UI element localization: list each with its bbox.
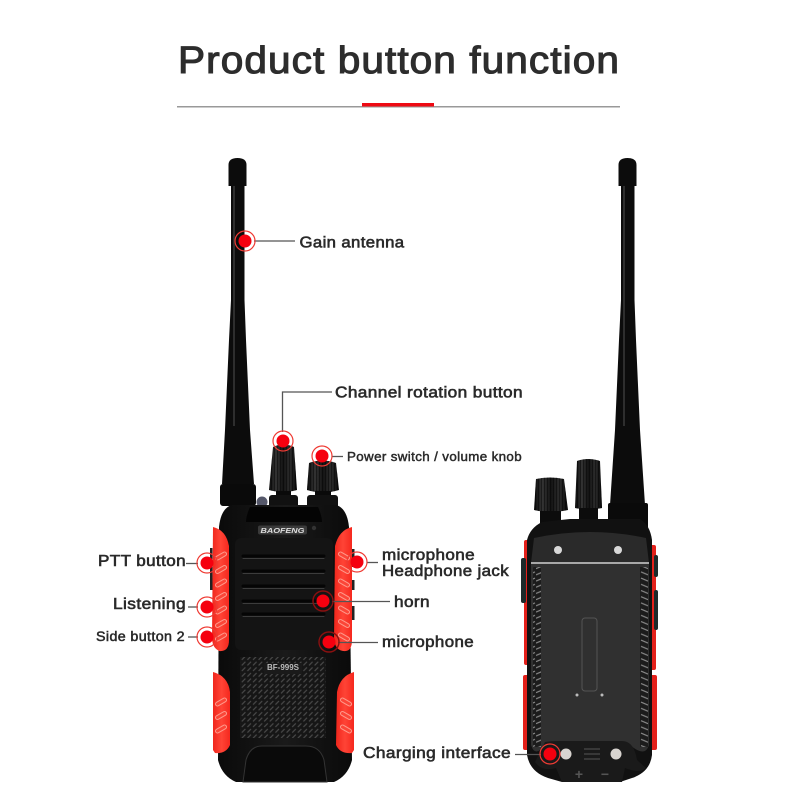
back left knob bbox=[534, 478, 568, 526]
right side buttons bbox=[352, 549, 354, 620]
battery plate bbox=[531, 563, 649, 752]
callout: gain antenna: Gain antenna bbox=[300, 234, 405, 252]
right lower red grip bbox=[336, 672, 354, 753]
callout: gain antenna bbox=[235, 231, 405, 252]
model label bbox=[264, 663, 302, 674]
title divider bbox=[177, 103, 620, 108]
callout: channel rotation button: Channel rotation button bbox=[335, 384, 523, 402]
charging base bbox=[535, 741, 646, 782]
callout: PTT button: PTT button bbox=[98, 553, 186, 570]
polarity marks: − bbox=[601, 766, 609, 782]
callout: microphone: microphone bbox=[382, 634, 474, 651]
brand badge: BAOFENG bbox=[260, 526, 305, 535]
callout: listening bbox=[113, 596, 217, 617]
front bottom clip bbox=[243, 746, 327, 782]
front radio bbox=[210, 158, 354, 782]
back body bbox=[527, 519, 652, 782]
left upper red grip bbox=[212, 527, 229, 651]
callout: listening: Listening bbox=[113, 596, 186, 613]
back screws bbox=[554, 546, 622, 554]
polarity marks bbox=[575, 766, 609, 782]
right upper red grip bbox=[334, 527, 352, 651]
polarity marks: + bbox=[575, 766, 583, 782]
callout: side button 2 bbox=[96, 627, 217, 647]
front body bbox=[218, 505, 352, 782]
title: Product button function bbox=[178, 40, 620, 82]
callout: charging interface: Charging interface bbox=[363, 745, 511, 762]
callout: microphone headphone jack: Headphone jack bbox=[382, 563, 509, 580]
indicator light bbox=[256, 496, 268, 508]
charging contacts bbox=[560, 748, 622, 760]
left lower red grip bbox=[213, 672, 230, 753]
speaker mesh bbox=[240, 657, 326, 738]
callout: power switch volume knob: Power switch / volume knob bbox=[347, 450, 522, 464]
model label: BF-999S bbox=[267, 663, 300, 672]
speaker panel bbox=[235, 538, 333, 650]
back side buttons bbox=[521, 555, 658, 630]
callout: horn: horn bbox=[394, 594, 430, 611]
channel rotation knob bbox=[269, 444, 298, 509]
callout: power switch volume knob bbox=[312, 446, 522, 466]
callout: channel rotation button bbox=[273, 384, 523, 451]
back antenna bbox=[608, 158, 648, 529]
callout: charging interface bbox=[363, 744, 560, 764]
callout: PTT button bbox=[98, 553, 217, 573]
front antenna bbox=[220, 158, 256, 506]
back top shoulder bbox=[531, 532, 649, 563]
right hatching bbox=[640, 567, 648, 747]
speaker slots bbox=[243, 556, 324, 616]
callout: horn bbox=[313, 591, 430, 611]
left hatching bbox=[533, 567, 541, 747]
callout: microphone headphone jack bbox=[347, 547, 509, 580]
callout: side button 2: Side button 2 bbox=[96, 629, 185, 644]
back radio bbox=[521, 158, 658, 782]
front top recess bbox=[246, 507, 322, 522]
back center knob bbox=[575, 459, 602, 526]
plate top line bbox=[531, 562, 649, 564]
callout: microphone bbox=[319, 632, 474, 652]
power volume knob bbox=[307, 460, 339, 509]
back side red strips bbox=[523, 540, 657, 750]
left side buttons bbox=[210, 548, 212, 590]
callout: microphone headphone jack: microphone bbox=[382, 547, 475, 564]
brand badge bbox=[258, 526, 316, 535]
belt clip outline bbox=[576, 618, 604, 696]
